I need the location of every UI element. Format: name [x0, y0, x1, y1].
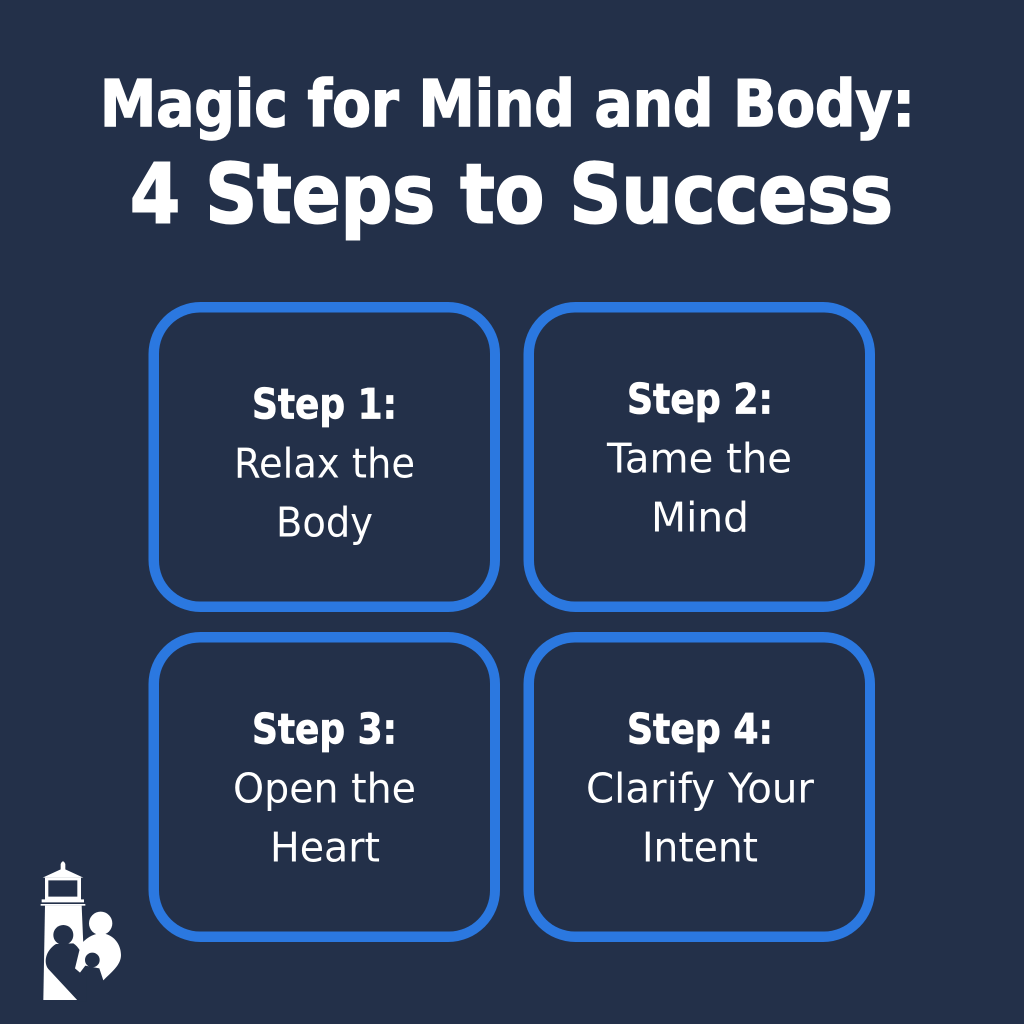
panel: step 2 — [524, 302, 875, 612]
panel: step 2: Mind — [651, 494, 749, 542]
panel: step 4 — [524, 632, 875, 942]
title: Magic for Mind and Body: — [100, 68, 915, 142]
panel: step 1: Body — [276, 498, 373, 546]
panel: step 3: Open the — [233, 764, 416, 812]
title: 4 Steps to Success — [130, 148, 893, 242]
panel: step 1: Step 1: — [252, 380, 397, 428]
title — [100, 68, 915, 242]
panel: step 1 — [148, 302, 500, 612]
icon: lighthouse and family logo — [41, 861, 121, 1002]
panel: step 1: Relax the — [234, 440, 415, 488]
panel: step 4: Clarify Your — [586, 764, 814, 812]
panel: step 4: Step 4: — [627, 704, 773, 754]
panel: step 3: Heart — [270, 824, 380, 872]
panel: step 4: Intent — [642, 824, 758, 872]
panel: step 3: Step 3: — [252, 704, 397, 754]
panel: step 3 — [148, 632, 500, 942]
panel: step 2: Step 2: — [627, 374, 773, 424]
panel: step 2: Tame the — [606, 434, 792, 482]
